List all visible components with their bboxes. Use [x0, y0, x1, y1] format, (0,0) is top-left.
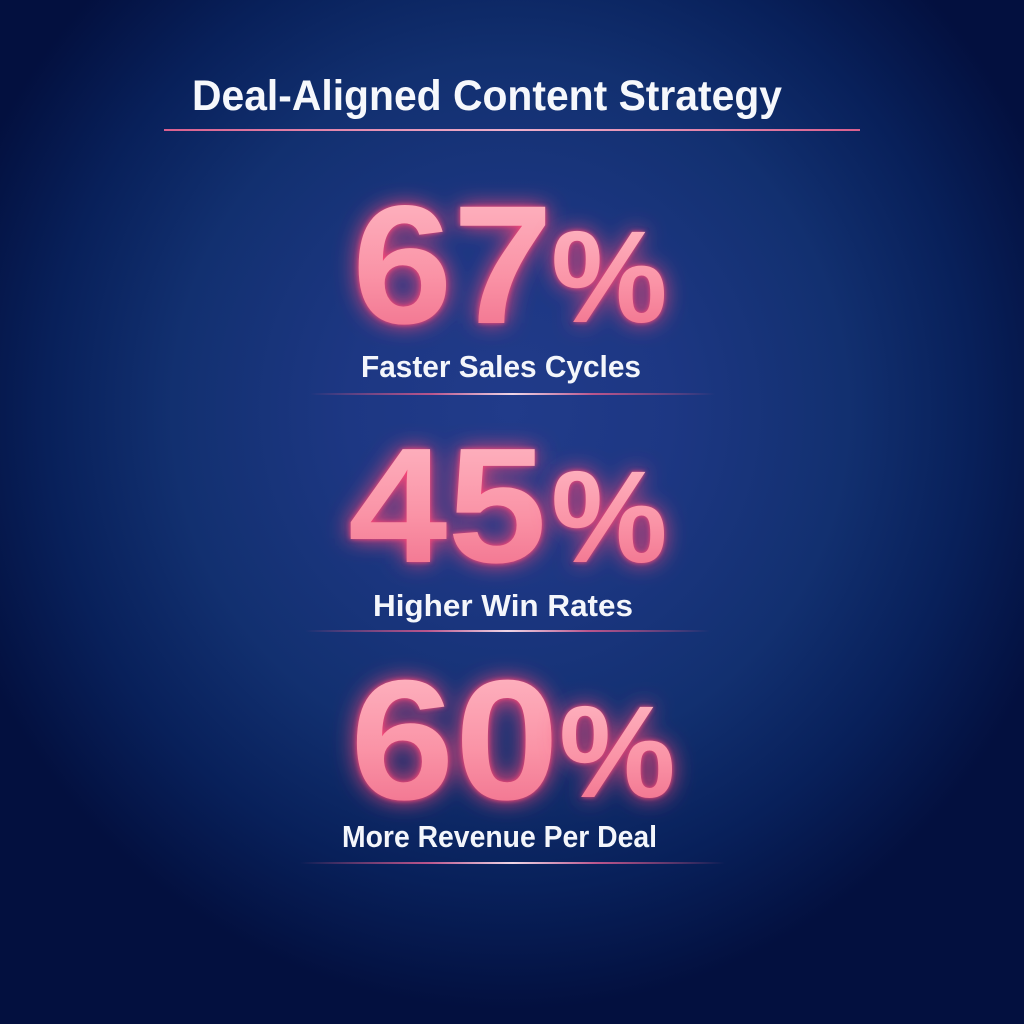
number: 45% [348, 415, 667, 597]
stat: 45% [305, 415, 710, 632]
stat: 60% [300, 645, 725, 864]
label: More Revenue Per Deal: More Revenue Per Deal [342, 820, 657, 854]
number: 45%: % [551, 443, 667, 590]
number: 60%: 60 [350, 645, 559, 836]
number: 60%: 60 [350, 645, 559, 836]
number: 45%: % [551, 443, 667, 590]
number: 67%: % [551, 203, 667, 350]
number: 45%: 45 [348, 415, 547, 597]
label: Higher Win Rates: Higher Win Rates [373, 589, 633, 623]
number: 67%: % [551, 203, 667, 350]
number: 60% [350, 645, 675, 836]
number: 67% [352, 171, 667, 360]
number: 67%: 67 [352, 171, 553, 360]
number: 45%: 45 [348, 415, 547, 597]
title: Deal-Aligned Content Strategy [192, 72, 782, 120]
number: 67%: 67 [352, 171, 553, 360]
number: 60%: % [559, 678, 675, 825]
stat: 67% [310, 171, 715, 395]
number: 60%: % [559, 678, 675, 825]
label: Faster Sales Cycles: Faster Sales Cycles [361, 350, 641, 384]
